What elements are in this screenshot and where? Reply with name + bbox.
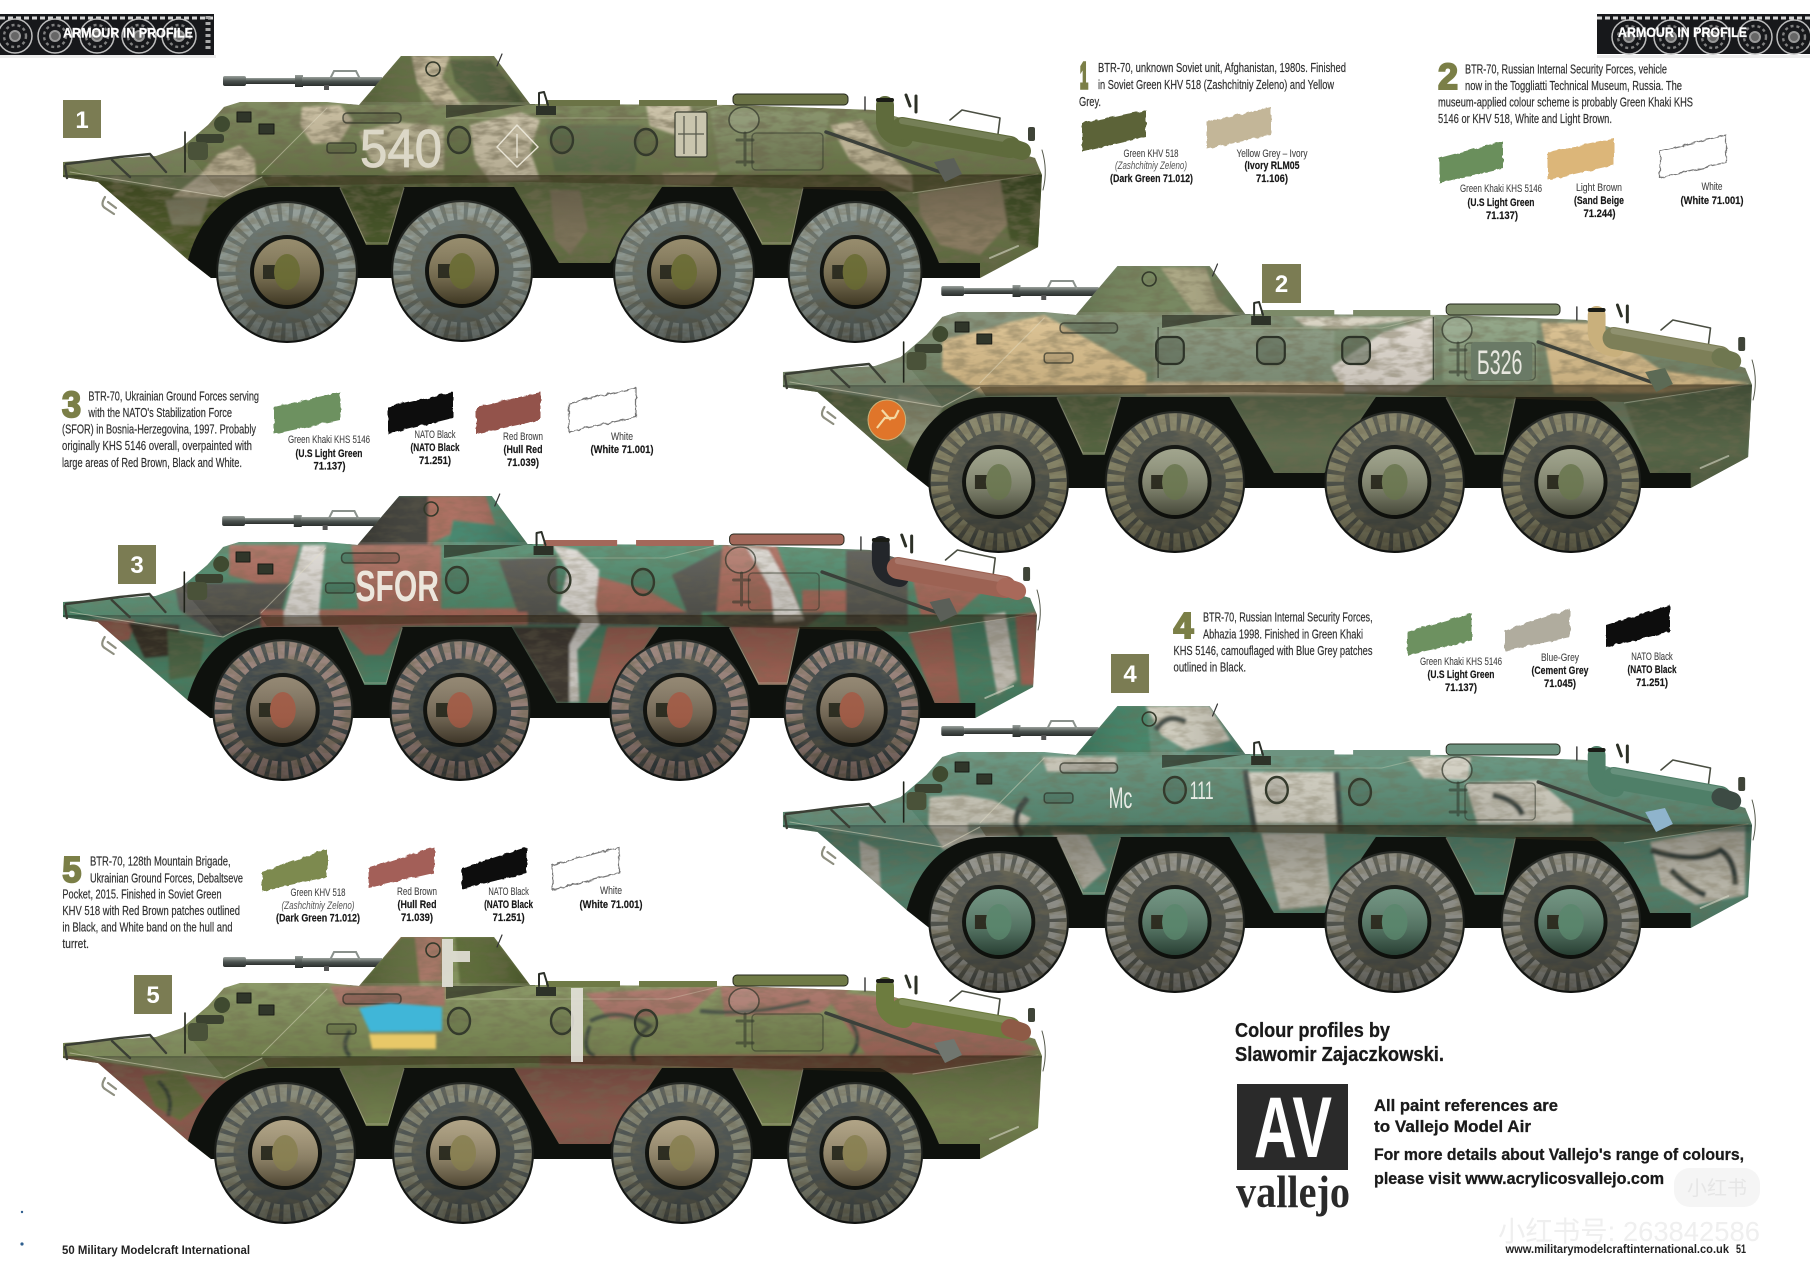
text block: profile credit: Colour profiles by	[1235, 1020, 1391, 1042]
icon: orange deer emblem	[868, 400, 906, 440]
paint label white: (White 71.001)	[590, 444, 654, 456]
panel: caption 3: 3	[62, 384, 81, 425]
swatch: green KHV 518	[262, 849, 327, 891]
panel: caption 1: BTR-70, unknown Soviet unit, Afghanistan, 1980s. Finished	[1098, 60, 1346, 75]
panel: caption 4: BTR-70, Russian Internal Security Forces,	[1203, 610, 1373, 624]
number badge 2: 2	[1275, 271, 1288, 298]
panel: caption 2: museum-applied colour scheme is probably Green Khaki KHS	[1438, 94, 1693, 110]
paint label white: (White 71.001)	[580, 899, 643, 911]
paint label green KHV 518: (Dark Green 71.012)	[276, 912, 360, 924]
panel: caption 4: outlined in Black.	[1174, 660, 1246, 674]
paint label white: (White 71.001)	[1680, 195, 1744, 207]
hull number: Б326	[1477, 344, 1522, 382]
paint label NATO black	[484, 886, 534, 924]
panel: caption 5: BTR-70, 128th Mountain Brigade,	[90, 854, 231, 868]
number plate	[1471, 342, 1532, 380]
paint label green khaki: Green Khaki KHS 5146	[288, 434, 370, 446]
panel: caption 2	[1438, 56, 1744, 222]
paint label green khaki: 71.137)	[1445, 682, 1477, 694]
panel: caption 1: in Soviet Green KHV 518 (Zashchitniy Zeleno) and Yellow	[1098, 77, 1334, 92]
paint label blue grey: 71.045)	[1544, 678, 1576, 690]
panel: caption 3: large areas of Red Brown, Black and White.	[62, 455, 242, 470]
panel: caption 3: (SFOR) in Bosnia-Herzegovina, 1997. Probably	[62, 422, 256, 436]
swatch: white	[569, 388, 636, 432]
swatch: blue grey	[1505, 609, 1570, 651]
watermark badge	[1674, 1168, 1760, 1207]
paint label light brown: (Sand Beige	[1574, 195, 1624, 207]
paint label green KHV 518: (Zashchitniy Zeleno)	[1115, 160, 1187, 172]
paint label green khaki	[1420, 656, 1502, 694]
swatch: ivory	[1207, 107, 1271, 149]
paint label green khaki	[288, 434, 370, 472]
number badge 5	[134, 975, 172, 1014]
panel: caption 4	[1174, 605, 1677, 694]
paint label NATO black: (NATO Black	[1628, 664, 1677, 676]
paint label green khaki: 71.137)	[314, 460, 346, 472]
panel: caption 2: now in the Toggliatti Technical Museum, Russia. The	[1465, 78, 1682, 93]
panel: caption 4: 4	[1174, 605, 1194, 646]
panel: caption 2: 5146 or KHV 518, White and Light Brown.	[1438, 111, 1612, 126]
paint label green khaki: Green Khaki KHS 5146	[1420, 656, 1502, 668]
paint label red brown: 71.039)	[401, 912, 433, 924]
swatch: green khaki	[1439, 141, 1503, 183]
paint label green khaki: (U.S Light Green	[296, 448, 363, 460]
vehicle 2 profile	[770, 260, 1770, 553]
panel: caption 1	[1079, 55, 1346, 185]
swatch: green khaki	[1407, 613, 1472, 655]
vehicle 1 profile	[50, 50, 1060, 343]
text block: paint references: All paint references are	[1374, 1096, 1558, 1115]
tactical diamond marking	[497, 125, 538, 167]
paint label red brown: (Hull Red	[504, 444, 542, 456]
paint label white	[590, 431, 654, 456]
panel: caption 1: 1	[1080, 55, 1088, 96]
swatch: red brown	[369, 847, 434, 888]
panel: caption 3: with the NATO's Stabilization Force	[88, 405, 232, 420]
swatch: light brown	[1548, 138, 1614, 180]
text block: paint references: to Vallejo Model Air	[1374, 1117, 1531, 1136]
panel: caption 2: 2	[1438, 56, 1458, 97]
paint label ivory: Yellow Grey – Ivory	[1236, 148, 1308, 160]
paint label white	[580, 885, 643, 911]
paint label white: White	[600, 885, 622, 897]
paint label green khaki: 71.137)	[1486, 210, 1518, 222]
panel: caption 3: BTR-70, Ukrainian Ground Forces serving	[88, 388, 259, 404]
paint label red brown: 71.039)	[507, 457, 539, 469]
paint label NATO black: NATO Black	[414, 429, 456, 441]
panel: caption 5: 5	[62, 849, 81, 890]
door panel	[675, 112, 707, 157]
ukrainian flag marking	[359, 1003, 442, 1049]
square ports	[1156, 317, 1433, 380]
panel: caption 5: in Black, and White band on the hull and	[62, 920, 233, 934]
icon: Vallejo logo	[1236, 1080, 1350, 1217]
paint label green KHV 518: (Dark Green 71.012)	[1110, 173, 1193, 185]
header banner right	[1597, 14, 1810, 58]
paint label blue grey	[1532, 652, 1589, 690]
panel: caption 5: KHV 518 with Red Brown patches outlined	[62, 903, 240, 918]
header banner right: ARMOUR IN PROFILE	[1618, 24, 1747, 40]
swatch: red brown	[476, 392, 541, 434]
panel: caption 5: Pocket, 2015. Finished in Soviet Green	[62, 886, 222, 902]
paint label green KHV 518: Green KHV 518	[1124, 148, 1178, 160]
swatch: NATO black	[462, 847, 526, 889]
footer right: 51	[1736, 1244, 1746, 1256]
markings M and 111	[1109, 777, 1214, 815]
paint label NATO black	[410, 429, 460, 467]
paint label white	[1680, 181, 1744, 207]
number badge 3: 3	[130, 552, 144, 579]
number badge 4: 4	[1123, 661, 1137, 688]
number badge 5: 5	[146, 982, 160, 1009]
swatch: white	[1660, 135, 1726, 178]
panel: caption 4: KHS 5146, camouflaged with Blue Grey patches	[1174, 643, 1373, 658]
vehicle 3 profile	[50, 490, 1055, 781]
swatch: NATO black	[1606, 605, 1670, 647]
number badge 1	[63, 100, 101, 138]
footer left: 50 Military Modelcraft International	[62, 1245, 250, 1257]
panel: caption 3	[62, 384, 654, 472]
paint label ivory: 71.106)	[1256, 173, 1288, 185]
paint label blue grey: (Cement Grey	[1532, 665, 1589, 677]
markings M and 111: Mc	[1109, 782, 1132, 815]
paint label NATO black: 71.251)	[419, 455, 451, 467]
paint label green khaki: (U.S Light Green	[1468, 197, 1535, 209]
paint label green KHV 518: (Zashchitniy Zeleno)	[282, 900, 355, 912]
panel: caption 5: turret.	[62, 936, 89, 951]
number badge 4	[1111, 654, 1149, 693]
paint label red brown	[397, 886, 437, 924]
text block: profile credit	[1235, 1020, 1444, 1066]
number badge 1: 1	[75, 107, 89, 134]
paint label green khaki	[1460, 183, 1542, 222]
number badge 3	[118, 545, 156, 584]
paint label red brown: (Hull Red	[398, 899, 436, 911]
paint label NATO black: (NATO Black	[410, 442, 460, 454]
swatch: NATO black	[388, 392, 453, 434]
margin dots	[20, 1211, 24, 1246]
text block: paint references: please visit www.acrylicosvallejo.com	[1374, 1169, 1664, 1188]
paint label red brown: Red Brown	[397, 886, 437, 898]
header banner left	[0, 14, 216, 58]
paint label NATO black: NATO Black	[488, 886, 529, 898]
vehicle 4 profile	[770, 700, 1770, 993]
paint label green khaki: (U.S Light Green	[1428, 669, 1495, 681]
paint label NATO black: NATO Black	[1631, 651, 1673, 663]
paint label green KHV 518: Green KHV 518	[290, 887, 346, 899]
vehicle 5 profile	[50, 931, 1060, 1224]
paint label ivory	[1236, 148, 1308, 185]
paint label green khaki: Green Khaki KHS 5146	[1460, 183, 1542, 195]
text block: paint references	[1374, 1096, 1744, 1188]
paint label red brown: Red Brown	[503, 431, 543, 443]
watermark badge: 小红书	[1687, 1172, 1747, 1201]
paint label light brown: Light Brown	[1576, 182, 1622, 194]
paint label green KHV 518	[1110, 148, 1193, 185]
markings M and 111: 111	[1190, 777, 1214, 805]
paint label white: White	[611, 431, 633, 443]
paint label ivory: (Ivory RLM05	[1244, 160, 1300, 172]
paint label red brown	[503, 431, 543, 469]
paint label NATO black: 71.251)	[1636, 677, 1668, 689]
header banner left: ARMOUR IN PROFILE	[63, 24, 193, 40]
text block: paint references: For more details about Vallejo's range of colours,	[1374, 1145, 1744, 1164]
panel: caption 1: Grey.	[1079, 94, 1101, 109]
paint label light brown	[1574, 182, 1624, 220]
swatch: dark green	[1082, 110, 1146, 152]
paint label NATO black: (NATO Black	[484, 899, 534, 911]
swatch: green khaki	[274, 392, 340, 434]
panel: caption 4: Abhazia 1998. Finished in Green Khaki	[1203, 626, 1363, 642]
hull number: 540	[360, 119, 442, 179]
footer right: www.militarymodelcraftinternational.co.uk	[1505, 1244, 1730, 1256]
paint label white: White	[1702, 181, 1722, 193]
paint label NATO black	[1628, 651, 1677, 689]
watermark id: 小红书号: 263842586	[1498, 1216, 1760, 1247]
paint label green KHV 518	[276, 887, 360, 924]
paint label NATO black: 71.251)	[493, 912, 525, 924]
panel: caption 2: BTR-70, Russian Internal Security Forces, vehicle	[1465, 62, 1667, 76]
white band	[442, 939, 583, 1062]
paint label light brown: 71.244)	[1584, 208, 1616, 220]
icon: Vallejo logo: AV	[1254, 1080, 1332, 1176]
text block: profile credit: Slawomir Zajaczkowski.	[1235, 1044, 1444, 1066]
panel: caption 5	[62, 847, 643, 951]
number badge 2	[1262, 264, 1301, 303]
icon: Vallejo logo: vallejo	[1236, 1166, 1350, 1217]
panel: caption 3: originally KHS 5146 overall, overpainted with	[62, 438, 252, 453]
swatch: white	[553, 847, 619, 890]
panel: caption 5: Ukrainian Ground Forces, Debaltseve	[90, 870, 243, 886]
paint label blue grey: Blue-Grey	[1541, 652, 1579, 664]
SFOR marking: SFOR	[355, 562, 439, 611]
